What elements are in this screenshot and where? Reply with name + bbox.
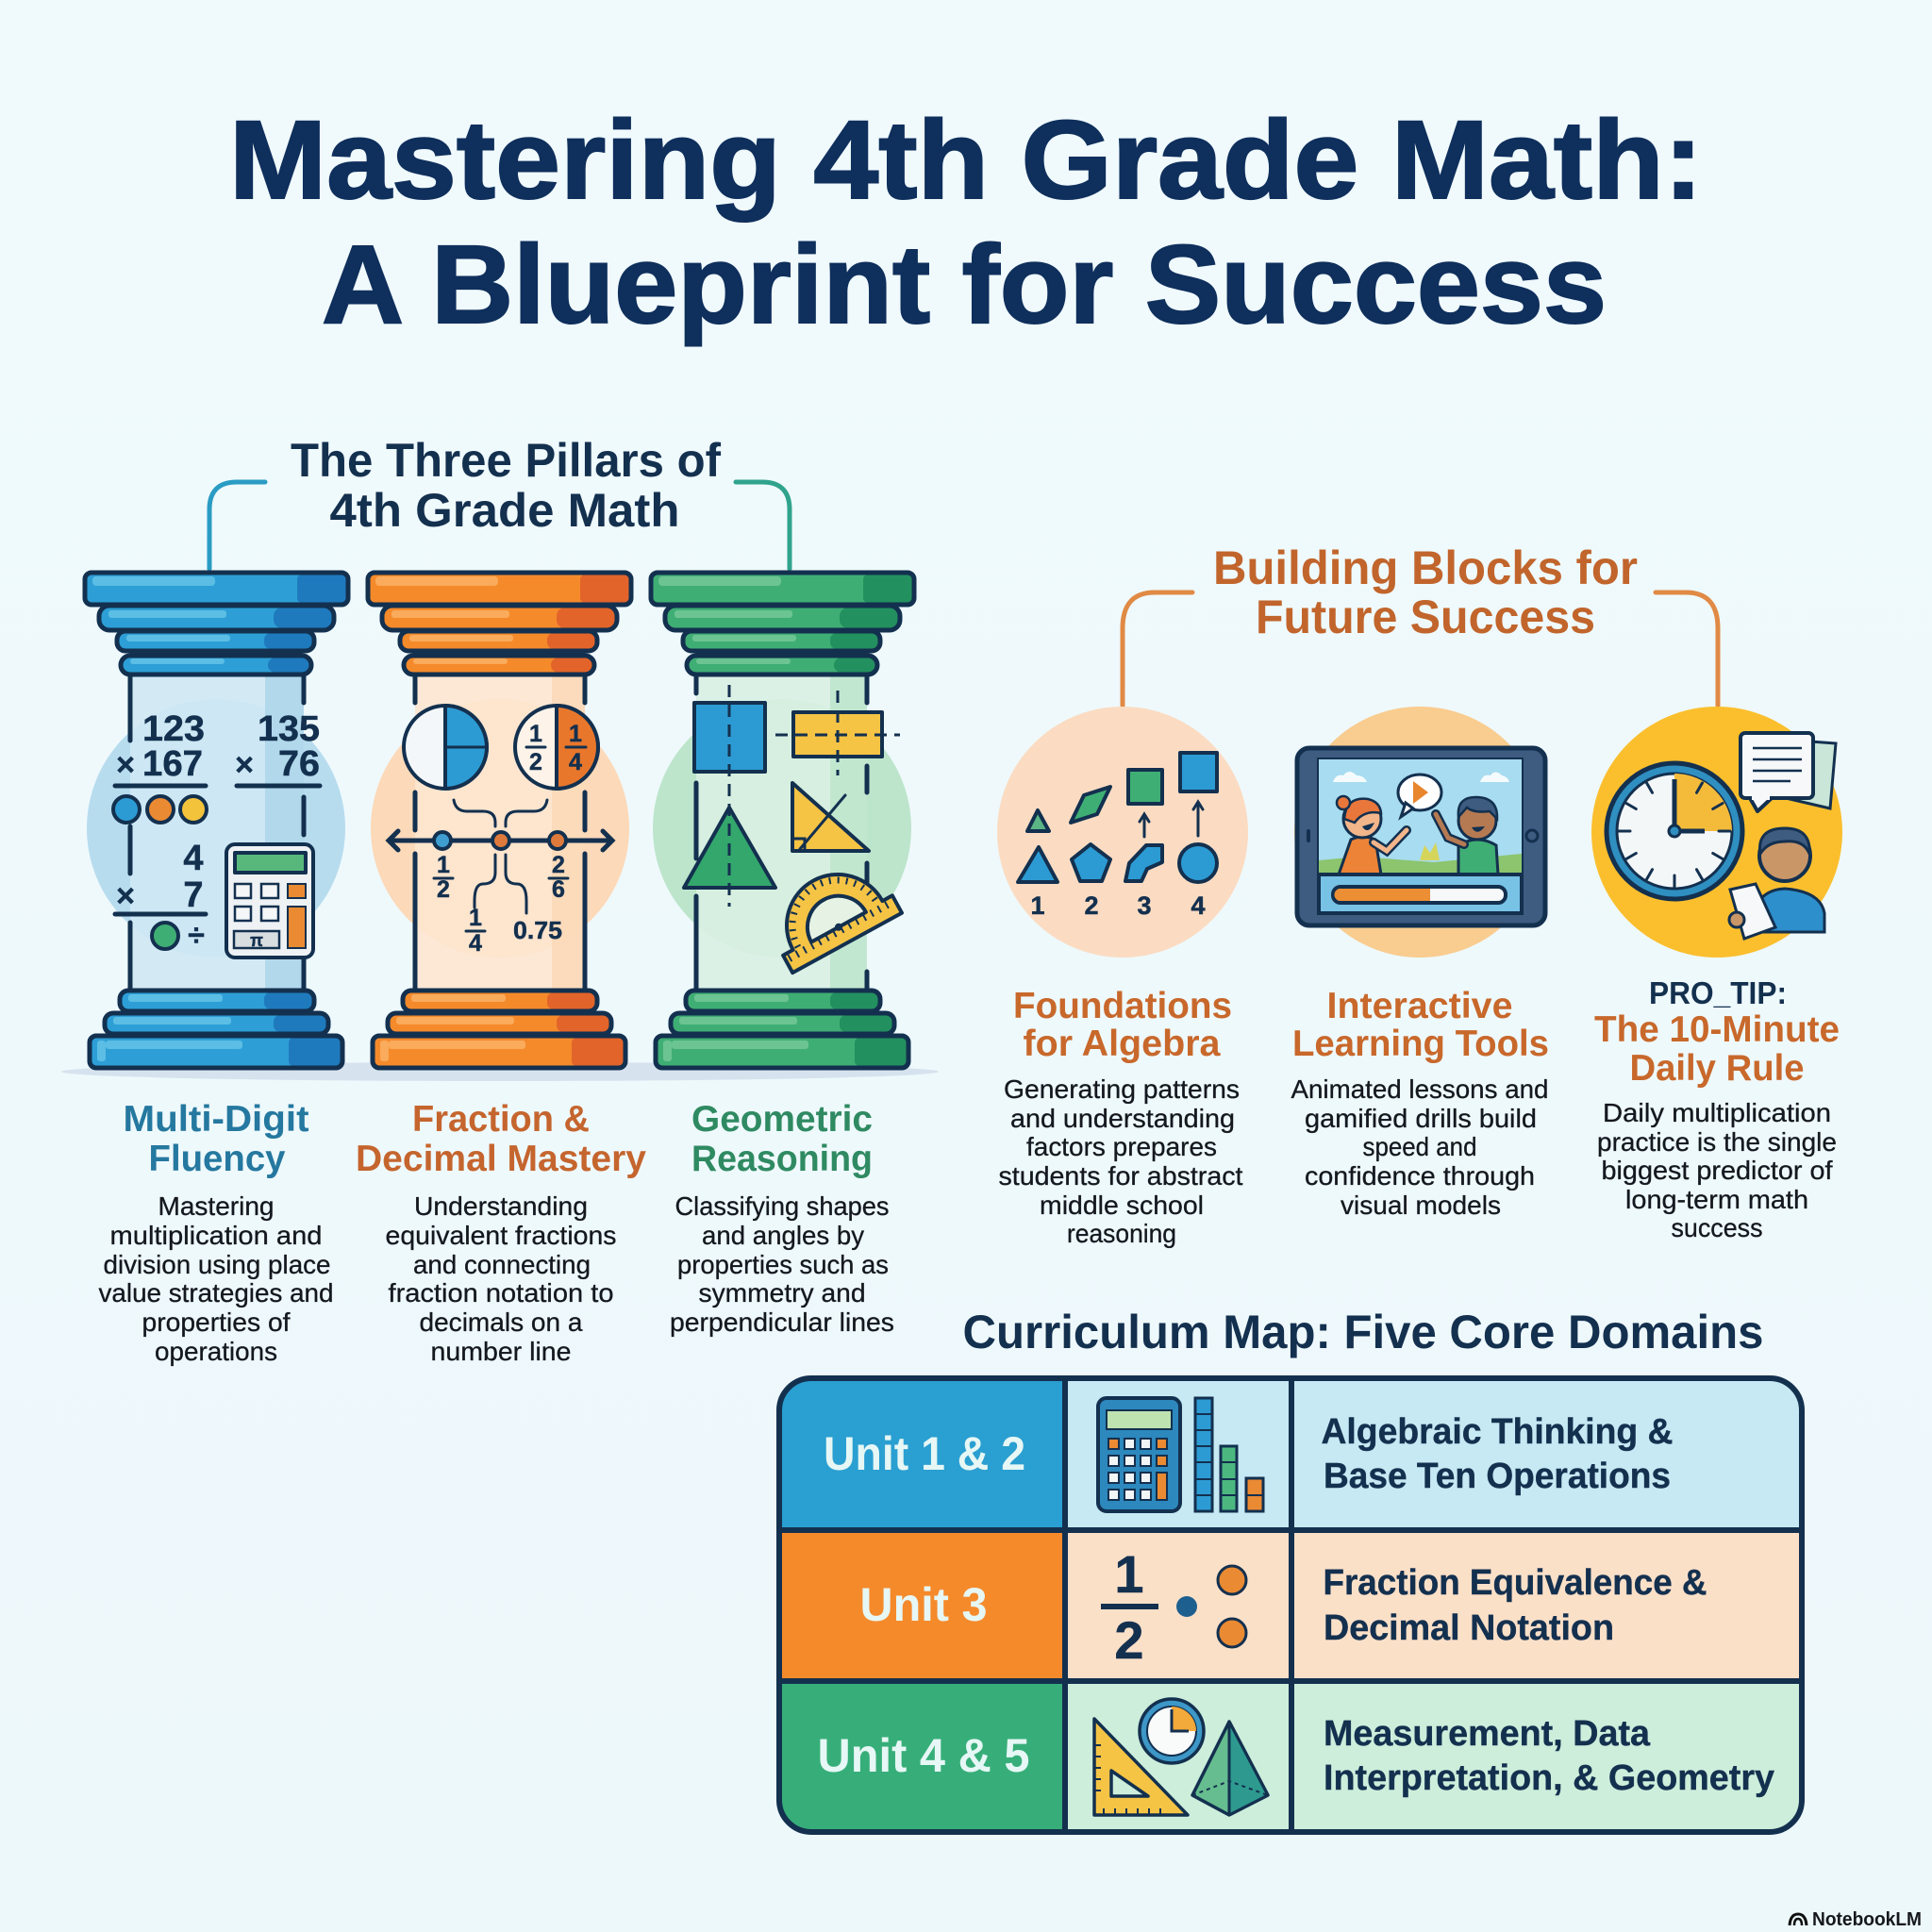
pillar label: geometric reasoning: Geometric	[691, 1099, 873, 1140]
text: multi-digit description: Mastering	[158, 1191, 274, 1221]
text: multi-digit description: multiplication and	[109, 1221, 323, 1250]
label: pro tip: The 10-Minute	[1594, 1009, 1840, 1050]
text: multi-digit description: division using place	[104, 1250, 330, 1279]
text: geometry description: Classifying shapes	[675, 1191, 889, 1221]
text: pro tip description	[1597, 1098, 1837, 1242]
fraction circle: half and quarter: 1	[529, 721, 542, 747]
text: measurement data geometry	[1324, 1714, 1774, 1798]
text: fraction equivalence: Fraction Equivalence &	[1323, 1563, 1707, 1603]
heading: building blocks	[1213, 541, 1638, 643]
bracket: building blocks	[1123, 592, 1718, 706]
yellow rectangle with symmetry lines	[793, 712, 882, 757]
text: fraction description	[385, 1191, 617, 1366]
text: geometry description: properties such as	[677, 1250, 889, 1279]
icon: ruler, clock and pyramid	[1094, 1699, 1268, 1815]
text: fraction description: decimals on a	[419, 1307, 583, 1337]
text: algebra description: middle school	[1040, 1191, 1204, 1220]
text: pro tip description: biggest predictor of	[1602, 1156, 1833, 1185]
multiplication problems: 123	[142, 709, 205, 749]
text: fraction description: equivalent fractions	[385, 1221, 617, 1250]
heading: curriculum map: Curriculum Map: Five Core Domains	[962, 1306, 1764, 1358]
dashed symmetry lines	[729, 685, 900, 907]
icon: algebra pattern circle: 1	[1030, 891, 1045, 920]
panel: pillar blue multi-digit fluency	[85, 573, 348, 1068]
text: multi-digit description	[98, 1191, 334, 1366]
text: interactive tools description: gamified drills build	[1305, 1104, 1537, 1133]
label: interactive learning tools: Learning Tools	[1292, 1024, 1549, 1064]
text: fraction description: fraction notation to	[389, 1278, 613, 1307]
panel: pillar orange fractions	[368, 573, 631, 1068]
multiplication problems: ×	[116, 747, 135, 783]
icon: tablet with learners circle	[1294, 707, 1545, 958]
heading: three pillars: The Three Pillars of	[291, 434, 721, 487]
text: pro tip description: success	[1672, 1213, 1762, 1242]
icon: one half and dots	[1101, 1544, 1246, 1670]
text: pro tip description: long-term math	[1625, 1185, 1808, 1214]
coloured counters	[113, 796, 207, 949]
text: multi-digit description: value strategies and	[98, 1278, 334, 1307]
text: fraction description: Understanding	[414, 1191, 588, 1221]
pillar label: multi-digit fluency	[123, 1099, 309, 1179]
orange column capital and base	[368, 573, 631, 1068]
icon: algebra pattern circle: 3	[1137, 891, 1152, 920]
text: interactive tools description: confidence through	[1305, 1161, 1535, 1191]
pillar label: multi-digit fluency: Multi-Digit	[123, 1099, 309, 1140]
green backdrop circle	[653, 699, 911, 958]
text: algebraic thinking: Base Ten Operations	[1324, 1457, 1671, 1496]
blue backdrop circle	[87, 699, 345, 958]
text: interactive tools description: speed and	[1362, 1132, 1477, 1161]
text: algebra description: factors prepares	[1026, 1132, 1217, 1161]
label: pro tip: PRO_TIP:	[1649, 975, 1787, 1010]
heading: three pillars	[291, 434, 721, 537]
text: geometry description: perpendicular lines	[670, 1307, 894, 1337]
main title	[229, 98, 1703, 347]
label: foundations for algebra	[1013, 986, 1232, 1064]
connector braces	[454, 800, 547, 913]
main title: A Blueprint for Success	[322, 223, 1607, 347]
number line	[389, 831, 612, 957]
multiplication problems	[115, 709, 320, 952]
number line: 6	[552, 876, 565, 903]
text: multi-digit description: operations	[155, 1337, 277, 1366]
icon: algebra pattern circle	[997, 707, 1248, 958]
text: algebra description: and understanding	[1010, 1104, 1235, 1133]
pillar label: fraction and decimal mastery	[356, 1099, 646, 1179]
multiplication problems: ÷	[188, 918, 205, 952]
fraction circle: half and quarter	[515, 706, 598, 789]
text: measurement data geometry: Interpretation, & Geometry	[1324, 1758, 1774, 1798]
text: interactive tools description: visual models	[1341, 1191, 1501, 1220]
pillar label: fraction and decimal mastery: Decimal Mastery	[356, 1139, 646, 1179]
row 3: unit 4 and 5: Unit 4 & 5	[817, 1729, 1030, 1782]
text: fraction description: number line	[430, 1337, 572, 1366]
text: algebraic thinking: Algebraic Thinking &	[1321, 1412, 1674, 1452]
text: algebra description: Generating patterns	[1004, 1074, 1240, 1104]
row 3: unit 4 and 5	[817, 1699, 1774, 1815]
fraction circle: half and quarter: 4	[569, 749, 582, 775]
orange column shaft	[415, 676, 585, 989]
bracket: three pillars	[209, 482, 790, 569]
row 1: unit 1 and 2: Unit 1 & 2	[824, 1427, 1025, 1480]
number line: 2	[437, 876, 450, 903]
text: interactive tools description: Animated lessons and	[1291, 1074, 1549, 1104]
panel: pillar green geometry	[651, 573, 914, 1068]
green column capital and base	[651, 573, 914, 1068]
text: fraction equivalence: Decimal Notation	[1324, 1608, 1614, 1648]
icon: algebra pattern circle: 2	[1084, 891, 1099, 920]
number line: 2	[552, 852, 565, 878]
number line: 1	[437, 852, 450, 878]
row 2: unit 3: Unit 3	[860, 1578, 987, 1631]
yellow right triangle	[792, 783, 869, 851]
table: curriculum map	[776, 1375, 1805, 1835]
blue column capital and base	[85, 573, 348, 1068]
icon: calculator: π	[250, 931, 263, 950]
pillar label: multi-digit fluency: Fluency	[149, 1139, 286, 1179]
icon: calculator	[226, 844, 313, 958]
text: geometry description: symmetry and	[698, 1278, 866, 1307]
text: pro tip description: Daily multiplication	[1603, 1098, 1831, 1127]
text: multi-digit description: properties of	[142, 1307, 291, 1337]
text: geometry description: and angles by	[702, 1221, 864, 1250]
heading: building blocks: Building Blocks for	[1213, 541, 1638, 594]
text: algebra description	[998, 1074, 1243, 1248]
label: pro tip	[1594, 975, 1840, 1089]
text: fraction description: and connecting	[413, 1250, 591, 1279]
fraction circle: half and quarter: 2	[529, 749, 542, 775]
pillar ground shadow	[61, 1062, 939, 1081]
pillar label: geometric reasoning	[691, 1099, 873, 1179]
text: geometry description	[670, 1191, 894, 1337]
main title: Mastering 4th Grade Math:	[229, 98, 1703, 223]
icon: one half and dots: 1	[1114, 1544, 1144, 1604]
multiplication problems: ×	[116, 878, 135, 914]
icon: clock and student circle	[1591, 707, 1842, 958]
number line: 0.75	[513, 916, 562, 944]
footer: NotebookLM badge: NotebookLM	[1812, 1909, 1922, 1930]
green column shaft	[696, 676, 867, 989]
text: interactive tools description	[1291, 1074, 1549, 1220]
icon: one half and dots: 2	[1114, 1610, 1144, 1670]
text: algebraic thinking	[1321, 1412, 1674, 1496]
pillar label: geometric reasoning: Reasoning	[691, 1139, 873, 1179]
text: algebra description: reasoning	[1067, 1219, 1176, 1248]
multiplication problems: ×	[235, 747, 254, 783]
orange backdrop circle	[371, 699, 629, 958]
heading: building blocks: Future Success	[1256, 591, 1595, 643]
blue rectangle with symmetry line	[694, 703, 765, 772]
pillar label: fraction and decimal mastery: Fraction &	[412, 1099, 590, 1140]
number line: 4	[469, 930, 482, 957]
text: algebra description: students for abstract	[998, 1161, 1243, 1191]
green triangle	[684, 808, 775, 888]
fraction circle: half and quarter: 1	[569, 721, 582, 747]
icon: algebra pattern circle: 4	[1191, 891, 1206, 920]
icon: calculator and blocks	[1098, 1398, 1263, 1511]
text: pro tip description: practice is the single	[1597, 1127, 1837, 1157]
fraction circle: three quarters	[404, 706, 487, 789]
text: measurement data geometry: Measurement, Data	[1324, 1714, 1651, 1754]
text: fraction equivalence	[1323, 1563, 1707, 1648]
label: foundations for algebra: for Algebra	[1023, 1024, 1221, 1064]
multiplication problems: 4	[183, 839, 204, 878]
blue column shaft	[130, 676, 304, 989]
label: interactive learning tools	[1292, 986, 1549, 1064]
multiplication problems: 76	[278, 744, 320, 784]
heading: three pillars: 4th Grade Math	[330, 484, 679, 537]
label: foundations for algebra: Foundations	[1013, 986, 1232, 1026]
row 1: unit 1 and 2	[824, 1398, 1674, 1511]
number line: 1	[469, 905, 482, 931]
label: interactive learning tools: Interactive	[1326, 986, 1513, 1026]
multiplication problems: 135	[258, 709, 320, 749]
label: pro tip: Daily Rule	[1630, 1048, 1804, 1089]
multiplication problems: 167	[142, 744, 203, 784]
protractor	[758, 851, 902, 973]
row 2: unit 3	[860, 1544, 1707, 1670]
multiplication problems: 7	[183, 875, 204, 915]
